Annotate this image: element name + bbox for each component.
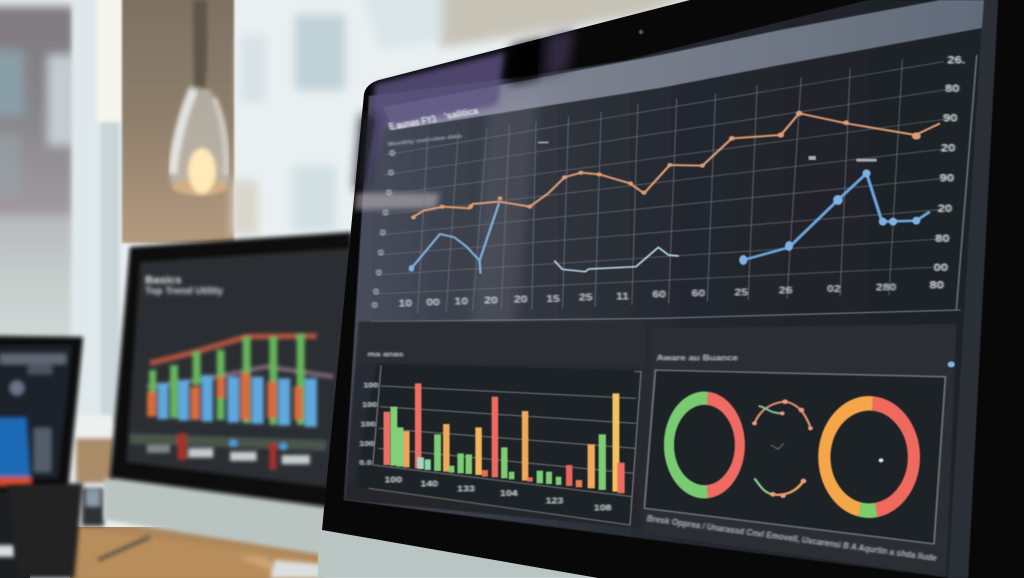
pendant lamp xyxy=(170,0,230,195)
bottom axis values: 20 xyxy=(514,295,528,305)
bottom axis values: 10 xyxy=(454,297,468,307)
panel background xyxy=(344,322,646,528)
right axis values: 20 xyxy=(941,141,956,154)
bar chart y labels: 0.0 xyxy=(359,459,372,467)
left axis values: 0 xyxy=(373,288,379,297)
blue series left xyxy=(411,203,499,273)
heading: Basics xyxy=(145,274,182,286)
donut panel xyxy=(644,324,957,577)
bottom axis values: 10 xyxy=(399,299,412,309)
screen xyxy=(126,248,352,490)
donut left: green and red xyxy=(669,398,740,492)
main monitor xyxy=(322,0,1024,578)
bottom axis values: 11 xyxy=(616,291,629,302)
second monitor xyxy=(104,232,352,556)
mug in foreground xyxy=(7,483,83,578)
third monitor, far left xyxy=(0,336,104,557)
heading: E aunas FY3 xyxy=(388,114,438,133)
blue markers xyxy=(409,169,920,272)
right axis values: 80 xyxy=(945,82,960,95)
bottom axis values: 25 xyxy=(734,287,748,298)
left axis values: 0 xyxy=(388,168,394,178)
bottom axis values: 02 xyxy=(827,284,841,295)
right axis values: 90 xyxy=(943,111,958,124)
right axis values: 80 xyxy=(935,232,950,245)
panel title: Aware au Buance xyxy=(657,354,738,362)
status row xyxy=(130,433,327,451)
bar chart x labels: 123 xyxy=(546,496,564,506)
line chart panel xyxy=(371,53,977,322)
bottom axis values: 280 xyxy=(876,282,896,293)
status dot xyxy=(948,361,955,367)
small dashboard xyxy=(130,274,333,470)
heading: 'salitica xyxy=(443,106,480,122)
bottom axis values: 25 xyxy=(579,292,593,303)
annotation marks xyxy=(538,142,877,162)
bar chart x labels xyxy=(384,475,612,513)
bottom axis values: 26 xyxy=(779,286,793,296)
bottom axis values: 15 xyxy=(546,294,560,305)
bar chart y labels xyxy=(359,381,379,467)
panel title: ma anas xyxy=(368,350,404,358)
orange markers xyxy=(411,111,921,219)
desk xyxy=(70,527,330,578)
tan wall xyxy=(122,0,234,243)
left axis values: 0 xyxy=(372,301,378,311)
left axis values: 0 xyxy=(386,188,392,198)
bar chart x labels: 133 xyxy=(457,485,475,494)
heading: Monthly overview data xyxy=(387,133,463,148)
small dashboard: Top Trend Utility xyxy=(145,286,223,297)
orange series xyxy=(413,113,940,217)
inner chart frame xyxy=(644,370,946,544)
right axis values: 90 xyxy=(940,171,955,184)
grid xyxy=(377,59,944,313)
bar chart y labels: 100 xyxy=(362,401,378,409)
bar chart x labels: 108 xyxy=(594,504,612,513)
bar chart y labels: 100 xyxy=(359,440,375,448)
stand xyxy=(104,478,330,556)
pale blue series middle xyxy=(554,247,679,272)
right axis values: 26. xyxy=(947,53,965,66)
right axis values: 20 xyxy=(938,202,953,215)
left axis values: 0 xyxy=(383,208,389,218)
screen glass xyxy=(344,0,998,578)
camera xyxy=(639,30,643,34)
centre arcs xyxy=(752,399,883,498)
bottom axis values: 20 xyxy=(484,296,498,306)
left axis values xyxy=(372,149,395,311)
panel background xyxy=(644,324,957,577)
bottom axis values: 60 xyxy=(652,290,666,300)
right axis values: 80 xyxy=(929,279,944,291)
chart lines xyxy=(369,365,641,525)
bezel xyxy=(110,232,352,510)
heading xyxy=(387,106,480,148)
bar chart x labels: 100 xyxy=(384,475,402,485)
bar chart y labels: 100 xyxy=(363,381,379,389)
main monitor stand xyxy=(318,528,600,578)
bottom axis values xyxy=(399,282,896,309)
vertical light reflections xyxy=(354,30,575,330)
bar chart y labels: 100 xyxy=(360,420,376,428)
bars xyxy=(383,383,625,493)
right glass edge xyxy=(948,0,998,578)
dark clutter at lower left xyxy=(0,480,30,578)
blue dashboard block xyxy=(0,418,30,478)
bar chart panel xyxy=(344,322,646,528)
bottom axis values: 00 xyxy=(426,297,440,308)
left axis values: 0 xyxy=(380,228,386,238)
top strip xyxy=(383,0,984,130)
bar chart x labels: 104 xyxy=(500,489,518,499)
left axis values: 0 xyxy=(389,149,395,159)
donut right: red, green and orange xyxy=(824,403,914,511)
right axis values xyxy=(929,53,965,291)
right axis values: 00 xyxy=(934,261,948,274)
blue series right xyxy=(743,173,930,260)
left axis values: 0 xyxy=(378,248,384,258)
purple reflection xyxy=(362,52,505,200)
bezel xyxy=(322,0,1024,578)
left axis values: 0 xyxy=(376,268,382,278)
bottom axis values: 60 xyxy=(692,289,705,299)
bar chart x labels: 140 xyxy=(420,480,438,489)
